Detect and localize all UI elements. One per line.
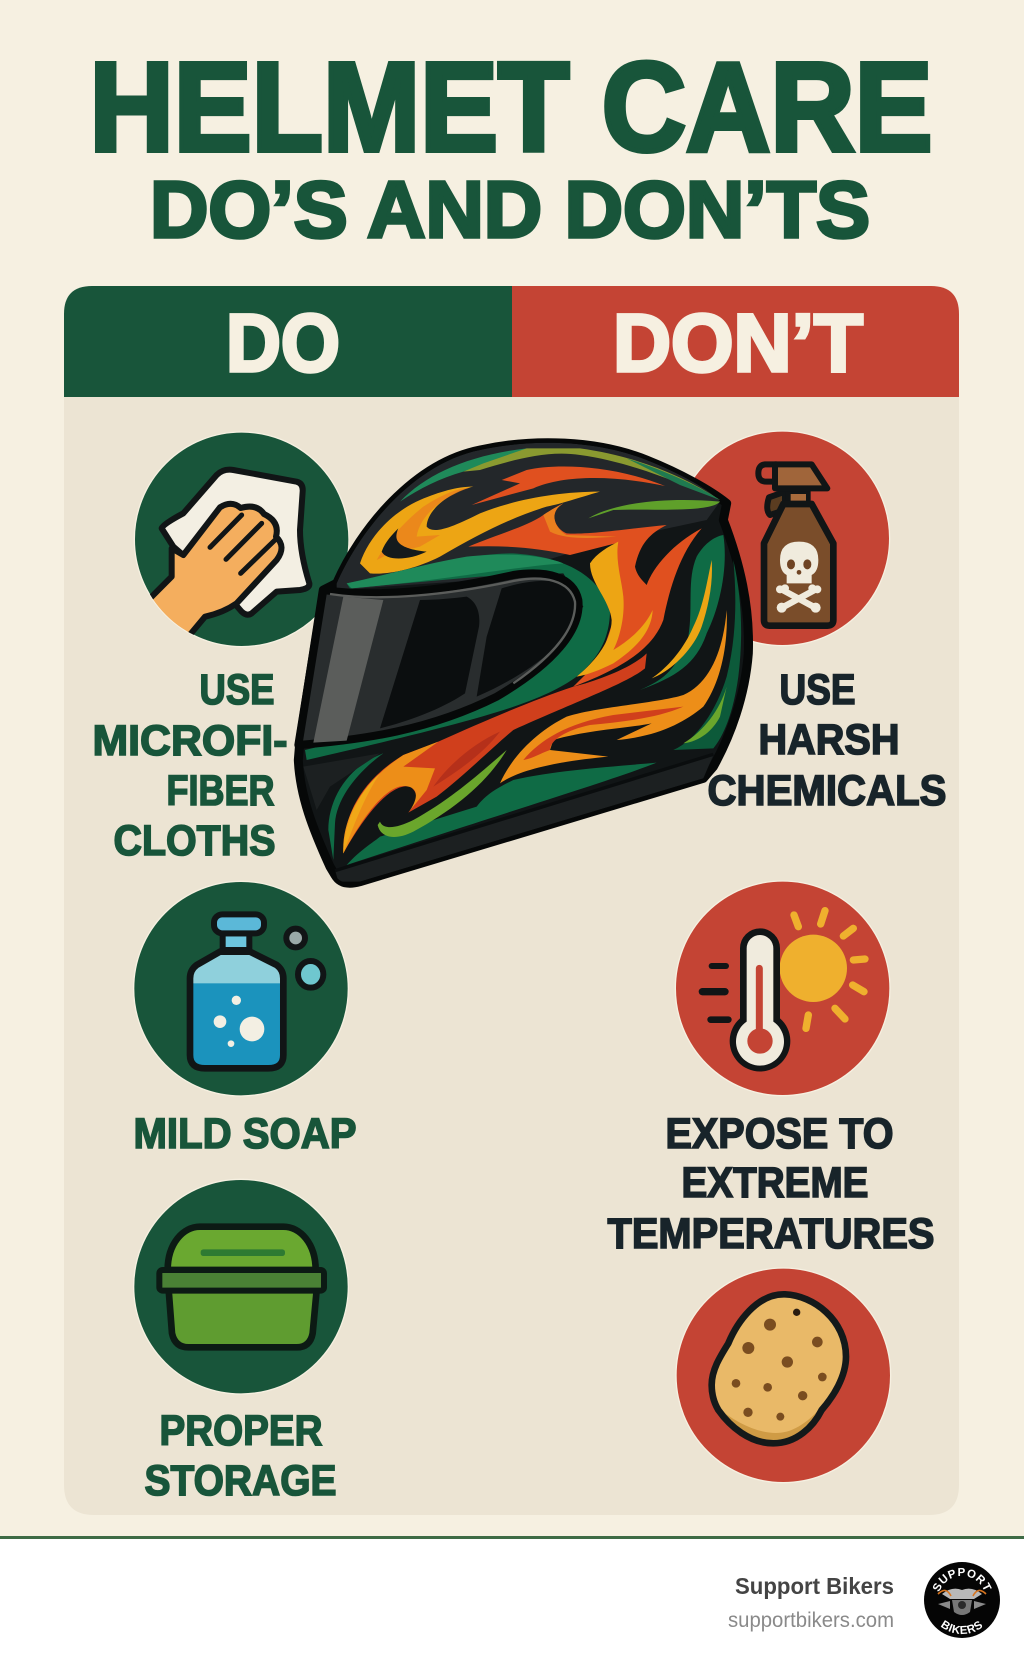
- label: use microfiber cloths: [92, 666, 288, 865]
- label: use microfiber cloths: MICROFI-: [92, 717, 288, 765]
- label: proper storage: STORAGE: [144, 1457, 336, 1505]
- panel: comparison body: [64, 397, 959, 1515]
- label: use harsh chemicals: CHEMICALS: [708, 767, 946, 815]
- header: do: DO: [226, 298, 340, 389]
- header: don't: DON’T: [613, 298, 863, 389]
- icon: abrasive sponge: [676, 1268, 891, 1483]
- label: use harsh chemicals: HARSH: [758, 716, 900, 764]
- label: use microfiber cloths: CLOTHS: [114, 817, 276, 865]
- label: expose to extreme temperatures: EXPOSE TO: [666, 1110, 894, 1158]
- helmet visor: [298, 573, 579, 745]
- helmet shell: [298, 443, 749, 883]
- subtitle: do's and don'ts: DO’S AND DON’TS: [150, 165, 870, 254]
- helmet: [298, 443, 749, 883]
- header: do: [64, 286, 512, 397]
- helmet flames: [303, 443, 741, 882]
- icon: thermometer and sun: [675, 881, 890, 1096]
- label: mild soap: MILD SOAP: [134, 1110, 356, 1158]
- footer url: supportbikers.com: [728, 1609, 894, 1632]
- label: expose to extreme temperatures: TEMPERATURES: [608, 1210, 934, 1258]
- logo: support bikers badge: SUPPORT: [933, 1568, 992, 1592]
- icon: poison spray bottle: [675, 431, 890, 646]
- label: use microfiber cloths: FIBER: [166, 767, 274, 815]
- label: use harsh chemicals: USE: [780, 666, 856, 714]
- icon: mild soap bottle: [134, 881, 348, 1096]
- icon: hand wiping with microfiber cloth: [134, 432, 349, 647]
- label: expose to extreme temperatures: EXTREME: [682, 1159, 868, 1207]
- header: don't: [512, 286, 959, 397]
- logo: support bikers badge: BIKERS: [940, 1620, 982, 1634]
- label: expose to extreme temperatures: [608, 1110, 934, 1258]
- label: use harsh chemicals: [708, 666, 946, 815]
- footer band: [0, 1536, 1024, 1666]
- footer brand name: Support Bikers: [735, 1573, 894, 1599]
- title: helmet care: HELMET CARE: [90, 36, 932, 178]
- logo: support bikers badge: [924, 1562, 1000, 1638]
- label: proper storage: PROPER: [160, 1407, 322, 1455]
- label: use microfiber cloths: USE: [200, 666, 274, 714]
- icon: storage container: [134, 1179, 348, 1394]
- label: proper storage: [144, 1407, 336, 1505]
